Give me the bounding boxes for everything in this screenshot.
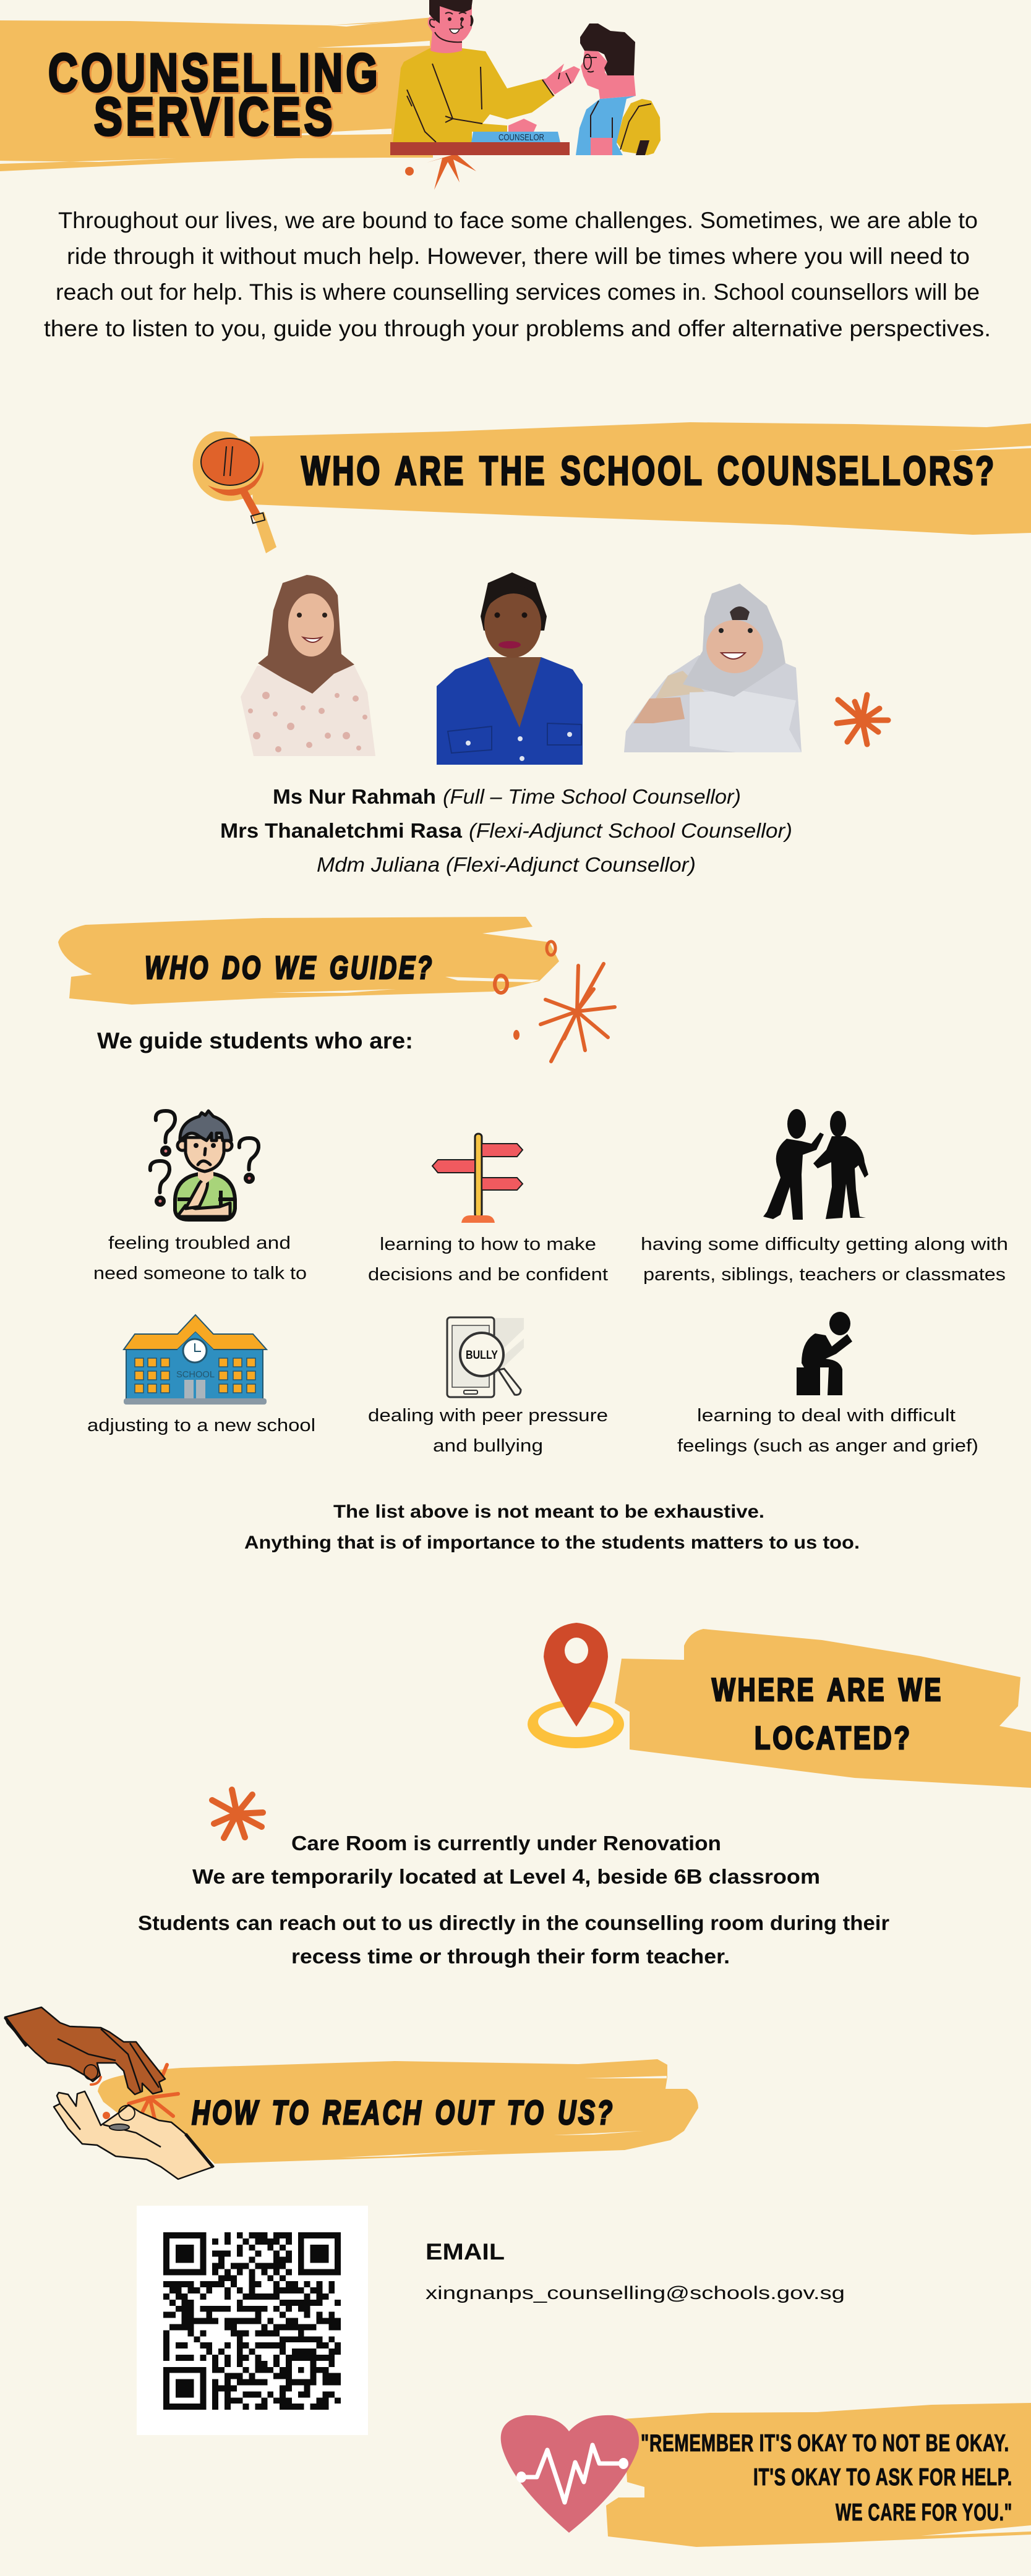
location text: We are temporarily located at Level 4, beside 6B classroom [192, 1865, 820, 1888]
heading banner [58, 917, 559, 1005]
location text: Students can reach out to us directly in the counselling room during their [138, 1911, 889, 1934]
email label: EMAIL [426, 2239, 505, 2264]
closing note: Anything that is of importance to the students matters to us too. [244, 1532, 860, 1553]
caption: feeling troubled and [108, 1233, 291, 1253]
name line: Mrs Thanaletchmi Rasa [220, 819, 792, 842]
icon: school building [124, 1315, 267, 1405]
intro paragraph: reach out for help. This is where counselling services comes in. School counsellors will be [56, 279, 980, 305]
heading banner [250, 422, 1031, 535]
item: new school [87, 1315, 315, 1435]
email address: xingnanps_counselling@schools.gov.sg [426, 2283, 845, 2303]
counsellor names [220, 785, 792, 876]
panel: who are the school counsellors [193, 422, 1031, 876]
photo: Ms Nur Rahmah [241, 575, 375, 756]
heading: HOW TO REACH OUT TO US? [192, 2093, 615, 2132]
icon: confused boy [150, 1111, 259, 1220]
photo: Mdm Juliana [624, 584, 802, 752]
panel: header [0, 0, 661, 190]
icon: phone with magnifier over BULLY [447, 1317, 524, 1397]
heading [712, 1672, 943, 1756]
name line: Ms Nur Rahmah [273, 785, 741, 808]
name line: Ms Nur Rahmah: Ms Nur Rahmah [273, 785, 436, 808]
panel: closing quote [501, 2403, 1031, 2547]
item: difficulty getting along [641, 1109, 1008, 1285]
location text: recess time or through their form teacher. [291, 1945, 730, 1968]
orange burst [91, 2065, 178, 2119]
closing note [244, 1502, 860, 1553]
illustration: counsellor and student: COUNSELOR [498, 132, 544, 143]
item: peer pressure [368, 1317, 608, 1456]
item: making decisions [368, 1134, 608, 1285]
icon: orange star [212, 1790, 263, 1838]
decorative star and dots [495, 942, 615, 1061]
name line: Mrs Thanaletchmi Rasa: Mrs Thanaletchmi Rasa [220, 819, 463, 842]
caption [368, 1235, 608, 1285]
intro paragraph [44, 208, 991, 341]
item: difficult feelings [677, 1312, 978, 1456]
splat below desk [405, 155, 476, 190]
photo: Mrs Thanaletchmi Rasa [437, 572, 583, 765]
name line: Ms Nur Rahmah: (Full – Time School Counsellor) [443, 785, 741, 808]
panel: where are we located [138, 1623, 1031, 1968]
caption [93, 1233, 307, 1283]
icon: phone with magnifier over BULLY: BULLY [466, 1349, 498, 1362]
icon: map pin [528, 1623, 624, 1748]
brown hand [5, 2007, 165, 2094]
title: SERVICES [94, 87, 336, 147]
caption: adjusting to a new school [87, 1416, 315, 1435]
icon: school building: SCHOOL [176, 1369, 215, 1380]
caption: learning to deal with difficult [697, 1406, 956, 1426]
intro paragraph: ride through it without much help. However, there will be times where you will need to [67, 244, 970, 269]
caption: having some difficulty getting along with [641, 1235, 1008, 1254]
caption: feelings (such as anger and grief) [677, 1436, 978, 1456]
icon: two hands [5, 2007, 213, 2179]
quote text [641, 2430, 1012, 2526]
caption: dealing with peer pressure [368, 1406, 608, 1426]
panel: who do we guide [58, 917, 1008, 1553]
header brush banner [0, 17, 433, 171]
caption [677, 1406, 978, 1456]
light hand [54, 2091, 213, 2179]
caption: parents, siblings, teachers or classmates [643, 1265, 1006, 1285]
icon: heart with pulse [501, 2415, 639, 2533]
caption: decisions and be confident [368, 1265, 608, 1285]
name line: Mrs Thanaletchmi Rasa: (Flexi-Adjunct School Counsellor) [469, 819, 792, 842]
heading banner [98, 2059, 698, 2164]
icon: magnifying glass [193, 431, 276, 553]
heading banner [615, 1629, 1031, 1788]
quote banner [606, 2403, 1031, 2547]
name line: Mdm Juliana: Mdm Juliana (Flexi-Adjunct Counsellor) [317, 853, 696, 876]
icon: two arguing silhouettes [763, 1109, 868, 1220]
heading: WHO DO WE GUIDE? [145, 950, 434, 986]
illustration: counsellor and student [390, 0, 661, 155]
item: feeling troubled [93, 1111, 307, 1283]
icon: sitting thinker silhouette [797, 1312, 852, 1395]
closing note: The list above is not meant to be exhaustive. [333, 1502, 764, 1522]
location text: Care Room is currently under Renovation [291, 1832, 721, 1855]
icon: signpost [432, 1134, 523, 1223]
QR code card [137, 2206, 368, 2435]
caption [368, 1406, 608, 1456]
title: COUNSELLING [48, 43, 381, 103]
caption [641, 1235, 1008, 1285]
icon: orange star [837, 695, 888, 744]
title [48, 43, 381, 147]
caption: learning to how to make [380, 1235, 596, 1254]
caption: need someone to talk to [93, 1264, 307, 1283]
caption: and bullying [433, 1436, 543, 1456]
panel: how to reach out [5, 2007, 845, 2435]
intro paragraph: there to listen to you, guide you through your problems and offer alternative perspectives. [44, 316, 991, 341]
location text [138, 1832, 889, 1968]
intro line: We guide students who are: [97, 1028, 413, 1053]
heading: LOCATED? [755, 1720, 912, 1756]
heading: WHERE ARE WE [712, 1672, 943, 1708]
intro paragraph: Throughout our lives, we are bound to face some challenges. Sometimes, we are able to [58, 208, 978, 233]
